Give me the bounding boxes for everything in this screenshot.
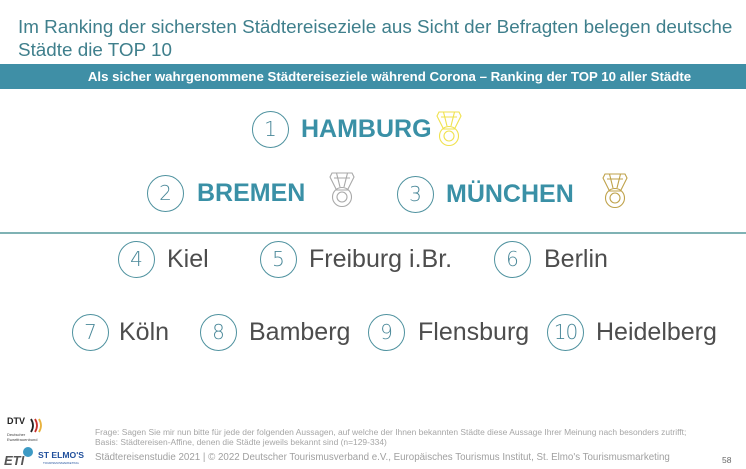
rank 7: Köln: 7 — [84, 320, 97, 344]
banner heading: Als sicher wahrgenommene Städtereiseziele während Corona – Ranking der TOP 10 aller Städte — [88, 69, 691, 84]
banner heading — [0, 64, 746, 89]
rank 6: Berlin: 6 — [506, 247, 519, 271]
logo: DTV: Deutscher — [7, 432, 25, 437]
rank 6: Berlin: Berlin — [544, 245, 608, 273]
icon: silver medal — [330, 172, 354, 207]
rank 10: Heidelberg: 10 — [554, 320, 577, 344]
rank 5: Freiburg — [260, 241, 452, 278]
logo: DTV: DTV — [7, 416, 25, 426]
question and base note: Frage: Sagen Sie mir nun bitte für jede der folgenden Aussagen, auf welche der Ihnen bekannten Städte diese Aussage Ihrer Meinung nach besonders zutrifft; — [95, 427, 686, 437]
rank 7: Köln: Köln — [119, 318, 169, 346]
rank 5: Freiburg: 5 — [272, 247, 285, 271]
title: Städte die TOP 10 — [18, 39, 172, 60]
rank 4: Kiel: 4 — [130, 247, 143, 271]
rank 9: Flensburg: Flensburg — [418, 318, 529, 346]
rank 10: Heidelberg — [547, 314, 717, 351]
rank 8: Bamberg: 8 — [212, 320, 225, 344]
source footer: Städtereisenstudie 2021 | © 2022 Deutscher Tourismusverband e.V., Europäisches Tourismus Institut, St. Elmo's Tourismusmarketing — [95, 452, 670, 462]
logo: DTV: Ewartfrauenbund — [7, 437, 37, 442]
rank 7: Köln — [72, 314, 169, 351]
logo: St. Elmo's — [38, 450, 84, 465]
rank 4: Kiel: Kiel — [167, 245, 209, 273]
rank 8: Bamberg: Bamberg — [249, 318, 350, 346]
rank number 3: 3 — [409, 182, 422, 206]
rank 10: Heidelberg: Heidelberg — [596, 318, 717, 346]
logo: St. Elmo's: TOURISMUSMARKETING — [43, 461, 79, 465]
rank number 2: 2 — [159, 181, 172, 205]
title: Im Ranking der sichersten Städtereiseziele aus Sicht der Befragten belegen deutsche — [18, 16, 732, 37]
rank number 2 — [147, 175, 184, 212]
question and base note — [95, 427, 686, 447]
logo: DTV — [7, 416, 42, 442]
rank number 1 — [252, 111, 289, 148]
rank number 1: 1 — [264, 117, 277, 141]
question and base note: Basis: Städtereisen-Affine, denen die Städte jeweils bekannt sind (n=129-334) — [95, 437, 387, 447]
rank 3: München — [397, 174, 628, 213]
city name Bremen: BREMEN — [197, 179, 305, 207]
logo: ETI: ETI — [4, 453, 24, 468]
rank number 3 — [397, 176, 434, 213]
logo: St. Elmo's: ST ELMO'S — [38, 450, 84, 460]
city name München: MÜNCHEN — [446, 180, 574, 208]
title — [18, 16, 732, 60]
rank 5: Freiburg: Freiburg i.Br. — [309, 245, 452, 273]
rank 9: Flensburg: 9 — [380, 320, 393, 344]
rank 9: Flensburg — [368, 314, 529, 351]
logo: ETI — [4, 447, 33, 468]
rank 1: Hamburg — [252, 111, 462, 148]
page number: 58 — [722, 455, 731, 465]
rank 6: Berlin — [494, 241, 608, 278]
icon: gold medal — [436, 112, 462, 146]
rank 4: Kiel — [118, 241, 209, 278]
rank 2: Bremen — [147, 172, 354, 212]
city name Hamburg: HAMBURG — [301, 115, 432, 143]
icon: bronze medal — [602, 174, 628, 208]
rank 8: Bamberg — [200, 314, 350, 351]
